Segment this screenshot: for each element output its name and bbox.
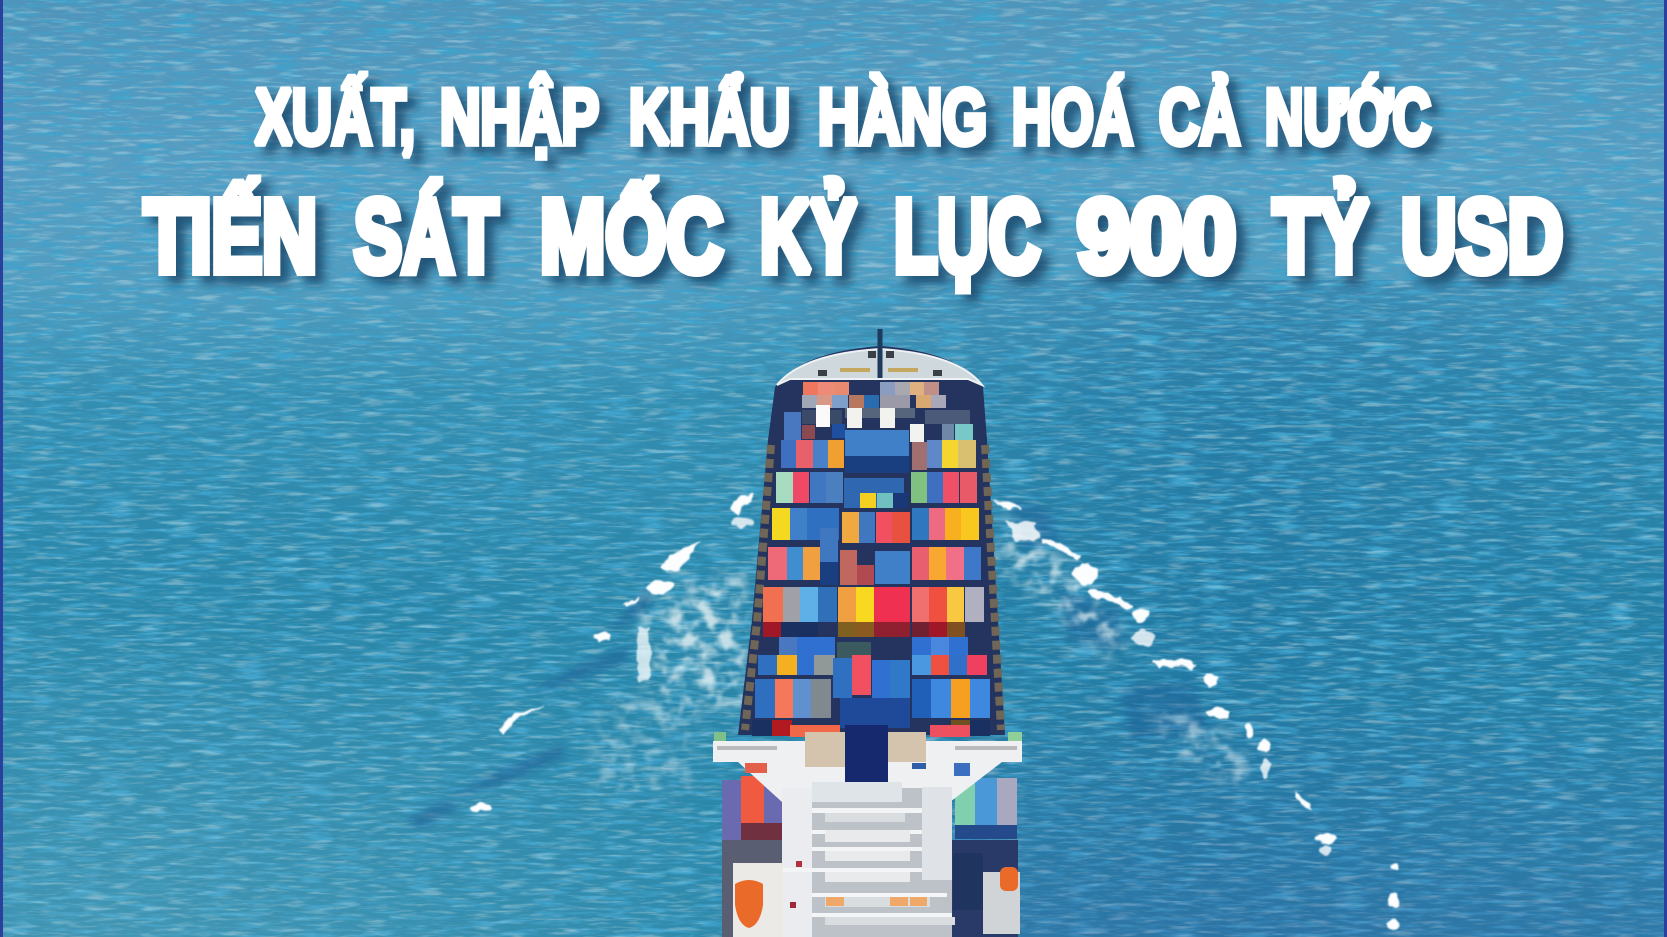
title line 1: XUẤT, xyxy=(255,73,415,161)
title line 1: NƯỚC xyxy=(1265,73,1431,161)
bow deck xyxy=(777,349,982,385)
aft side containers xyxy=(722,776,1018,937)
left wake of the ship xyxy=(405,495,753,828)
title line 1: CẢ xyxy=(1159,73,1240,161)
bow deck equipment xyxy=(818,351,942,376)
tan decks xyxy=(805,732,926,767)
title line 2: LỤC xyxy=(894,178,1040,294)
title line 1 xyxy=(255,73,1431,161)
bridge wing details xyxy=(714,732,1022,776)
title xyxy=(144,73,1563,294)
forward containers xyxy=(784,382,973,442)
title line 1: KHẨU xyxy=(629,73,790,161)
mast xyxy=(878,329,882,378)
hull xyxy=(738,346,1005,735)
right page edge line xyxy=(1664,0,1667,937)
starboard aft deck xyxy=(953,853,983,910)
title line 2: TIẾN xyxy=(144,178,317,294)
left page edge line xyxy=(0,0,3,937)
title line 2: KỶ xyxy=(760,178,857,294)
title line 2: 900 xyxy=(1077,178,1236,294)
starboard lifeboat xyxy=(1000,867,1018,891)
container rows xyxy=(752,430,990,737)
title line 2: TỶ xyxy=(1273,178,1369,294)
dark blue bridge block xyxy=(845,725,888,782)
bridge wings xyxy=(713,741,1022,802)
title line 1: HOÁ xyxy=(1012,73,1133,161)
title line 1: HÀNG xyxy=(818,73,987,161)
title line 2: USD xyxy=(1401,178,1563,294)
hull side walkways xyxy=(745,445,1001,730)
right wake of the ship xyxy=(993,498,1399,930)
title line 2 xyxy=(144,178,1563,294)
title line 1: NHẬP xyxy=(440,73,599,161)
container ship xyxy=(713,329,1022,937)
title line 2: SÁT xyxy=(354,178,498,294)
port lifeboat xyxy=(733,863,783,937)
title line 2: MỐC xyxy=(540,178,723,294)
superstructure xyxy=(782,782,955,937)
